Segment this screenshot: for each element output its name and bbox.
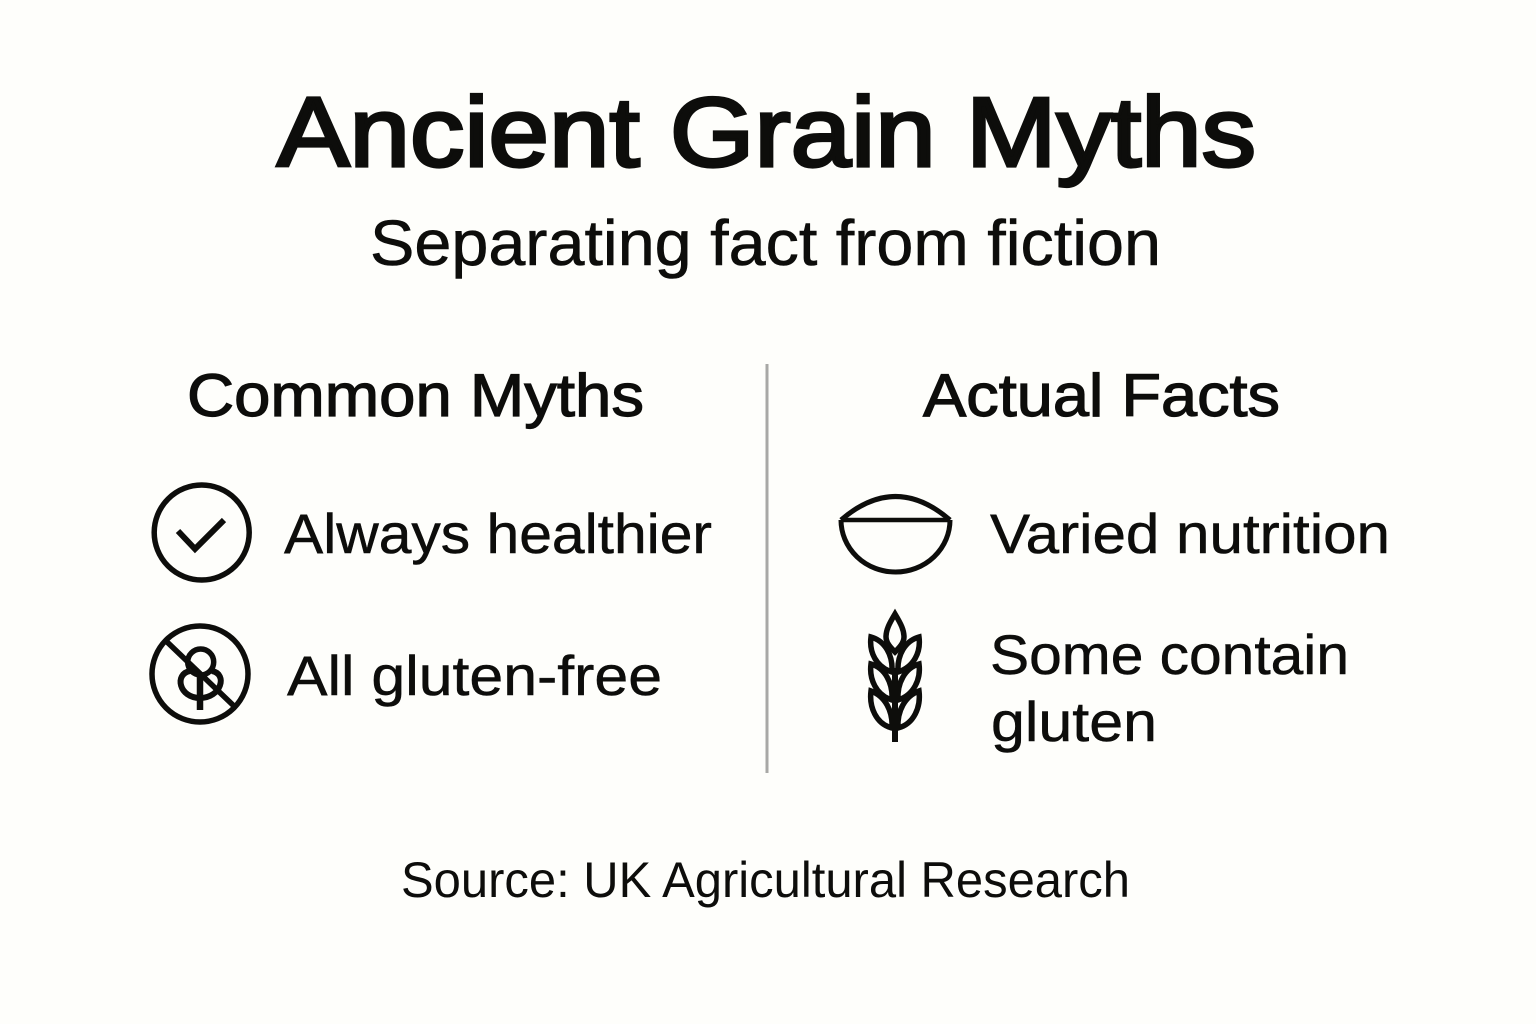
icon: no gluten [152,626,248,722]
text: some contain gluten [990,623,1349,753]
heading: common myths: Common Myths [187,362,644,429]
text: always healthier: Always healthier [284,502,712,565]
icon: check in circle [154,485,249,580]
text: some contain gluten: gluten [991,690,1157,753]
icon: bowl [841,496,950,572]
subtitle: Separating fact from fiction [370,207,1161,279]
text: varied nutrition: Varied nutrition [990,502,1390,565]
panel: actual facts [841,362,1390,753]
text: all gluten-free: All gluten-free [287,644,662,707]
divider [766,364,768,773]
source: Source: UK Agricultural Research [401,852,1130,908]
icon: wheat [871,614,919,742]
title: Ancient Grain Myths [277,77,1256,187]
text: some contain gluten: Some contain [990,623,1349,686]
panel: common myths [152,362,712,722]
heading: actual facts: Actual Facts [923,362,1280,429]
